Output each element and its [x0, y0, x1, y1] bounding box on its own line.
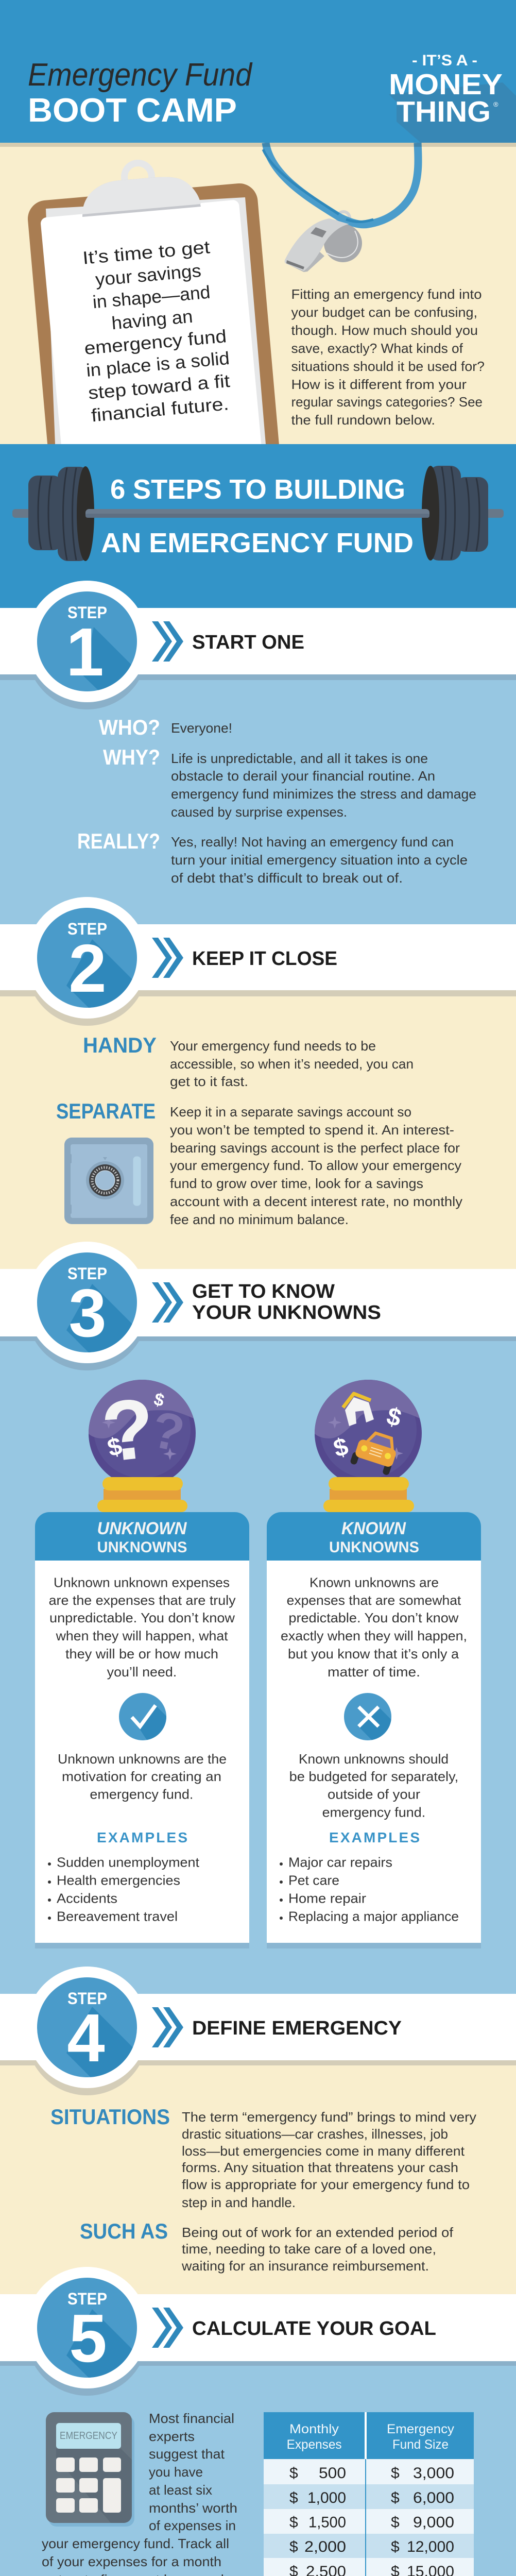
- examples: Health emergencies: [57, 1872, 180, 1888]
- examples: [280, 1829, 459, 1924]
- step 5 text: [42, 2411, 237, 2576]
- logo: It's a Money Thing: - IT’S A -: [412, 52, 477, 69]
- step 1 content: Life is unpredictable, and all it takes is one: [171, 751, 428, 766]
- step 5 banner: [0, 2267, 516, 2396]
- step 4 content: drastic situations—car crashes, illnesses, job: [182, 2126, 448, 2142]
- step 5 text: experts: [149, 2429, 195, 2444]
- step 4 banner: [0, 1967, 516, 2095]
- step 2 content: HANDY: [83, 1033, 157, 1057]
- step 4 content: forms. Any situation that threatens your cash: [182, 2160, 458, 2175]
- step 1 content: caused by surprise expenses.: [171, 804, 347, 820]
- step 2 banner: STEP: [67, 920, 107, 938]
- step 1 content: of debt that’s difficult to break out of.: [171, 870, 403, 886]
- table rows: $: [289, 2514, 298, 2531]
- verdict: Unknown unknowns are the: [58, 1751, 227, 1767]
- step 4 content: step in and handle.: [182, 2195, 296, 2210]
- logo: It's a Money Thing: [389, 52, 516, 143]
- icon: crystal ball, question marks: $: [105, 1432, 125, 1462]
- step 1 banner: STEP: [67, 603, 107, 622]
- table rows: $: [289, 2489, 298, 2506]
- step 4 content: The term “emergency fund” brings to mind very: [182, 2109, 476, 2125]
- step 5 text: of your expenses for a month: [42, 2554, 221, 2569]
- verdict: be budgeted for separately,: [289, 1769, 458, 1784]
- description: [281, 1574, 467, 1680]
- step 4 banner: STEP: [67, 1989, 107, 2008]
- step 3 banner: YOUR UNKNOWNS: [192, 1302, 381, 1324]
- step 1 banner: START ONE: [192, 632, 304, 653]
- step 4 content: flow is appropriate for your emergency fund to: [182, 2177, 470, 2192]
- table rows: $: [391, 2465, 400, 2482]
- table rows: $: [391, 2538, 400, 2555]
- step 5 text: your emergency fund. Track all: [42, 2536, 229, 2551]
- icon: crystal ball, question marks: ?: [97, 1380, 159, 1480]
- step 2 banner: [0, 897, 516, 1026]
- icon: crystal ball, house and car: $: [331, 1433, 351, 1463]
- step 1 content: REALLY?: [77, 829, 160, 853]
- examples: [48, 1829, 200, 1924]
- logo: It's a Money Thing: MONEY: [389, 68, 503, 101]
- description: Known unknowns are: [309, 1574, 439, 1590]
- step 4 content: SUCH AS: [80, 2219, 168, 2243]
- table rows: 3,000: [413, 2465, 454, 2482]
- examples: Sudden unemployment: [57, 1855, 200, 1870]
- panel heading: [97, 1519, 187, 1556]
- description: matter of time.: [328, 1664, 420, 1680]
- icon: clip: [82, 160, 201, 217]
- icon: cross mark: [344, 1693, 391, 1740]
- step 1 content: [77, 715, 476, 886]
- step 5 text: suggest that: [149, 2446, 225, 2462]
- examples: Pet care: [288, 1872, 339, 1888]
- panel: unknown unknowns: [35, 1512, 249, 1948]
- step 2 banner: 2: [68, 930, 107, 1006]
- intro text: though. How much should you: [291, 323, 478, 338]
- icon: chevrons: [152, 1282, 183, 1323]
- logo: It's a Money Thing: ®: [493, 100, 498, 108]
- header band: [0, 0, 516, 147]
- description: Unknown unknown expenses: [54, 1574, 230, 1590]
- icon: crystal ball, house and car: $: [384, 1402, 404, 1432]
- verdict: Known unknowns should: [299, 1751, 449, 1767]
- intro text: How is it different from your: [291, 377, 467, 392]
- table rows: 1,500: [308, 2514, 346, 2531]
- panel: known unknowns: [267, 1512, 481, 1948]
- icon: crystal ball, house and car: [315, 1376, 422, 1512]
- intro text: your budget can be confusing,: [291, 304, 477, 320]
- step 2 content: your emergency fund. To allow your emergency: [170, 1158, 461, 1173]
- step 1 content: turn your initial emergency situation into a cycle: [171, 852, 468, 868]
- icon: chevrons: [152, 2007, 183, 2047]
- step 1 banner: [0, 581, 516, 709]
- step 5 banner: 5: [69, 2300, 107, 2376]
- main heading: 6 STEPS TO BUILDING: [110, 474, 405, 505]
- clipboard text: step toward a fit: [88, 371, 231, 403]
- verdict: [289, 1751, 458, 1820]
- step 4 content: waiting for an insurance reimbursement.: [181, 2258, 429, 2274]
- examples: EXAMPLES: [97, 1829, 187, 1845]
- icon: crystal ball, question marks: $: [152, 1389, 166, 1411]
- description: but you know that it’s only a: [288, 1646, 459, 1662]
- step 2 content: [56, 1033, 462, 1227]
- step 3 banner: [0, 1242, 516, 1370]
- step 4 content: SITUATIONS: [50, 2105, 170, 2129]
- step 5 banner: CALCULATE YOUR GOAL: [192, 2318, 436, 2340]
- step 2 content: bearing savings account is the perfect place for: [170, 1140, 460, 1156]
- step 2 banner: KEEP IT CLOSE: [192, 948, 337, 970]
- examples: Accidents: [57, 1891, 117, 1906]
- table header: [287, 2422, 455, 2452]
- step 2 content: Keep it in a separate savings account so: [170, 1104, 411, 1120]
- examples: Bereavement travel: [57, 1908, 178, 1924]
- description: when they will happen, what: [56, 1628, 228, 1643]
- step 1 content: obstacle to derail your financial routine. An: [171, 768, 435, 784]
- step 5 text: of expenses in: [149, 2518, 236, 2533]
- description: [49, 1574, 236, 1680]
- intro text: Fitting an emergency fund into: [291, 286, 482, 302]
- step 2 content: you won’t be tempted to spend it. An interest-: [170, 1122, 454, 1138]
- description: you’ll need.: [107, 1664, 177, 1680]
- main heading: [101, 474, 414, 558]
- examples: Replacing a major appliance: [288, 1908, 459, 1924]
- icon: chevrons: [152, 2308, 183, 2348]
- table header: Monthly: [289, 2422, 339, 2436]
- step 1 content: Everyone!: [171, 720, 232, 736]
- table rows: 12,000: [407, 2538, 454, 2555]
- panel heading: KNOWN: [341, 1519, 406, 1538]
- description: expenses that are somewhat: [287, 1592, 461, 1608]
- step 1 banner: 1: [66, 614, 104, 690]
- step 1 content: Yes, really! Not having an emergency fund can: [171, 834, 454, 850]
- title: [28, 57, 253, 129]
- intro text: save, exactly? What kinds of: [291, 341, 463, 356]
- table rows: $: [289, 2465, 298, 2482]
- step 2 content: fee and no minimum balance.: [170, 1212, 349, 1227]
- intro text: situations should it be used for?: [291, 359, 485, 374]
- description: unpredictable. You don’t know: [49, 1610, 235, 1625]
- step 4 content: Being out of work for an extended period of: [182, 2225, 454, 2240]
- clipboard text: your savings: [95, 261, 202, 290]
- main heading: AN EMERGENCY FUND: [101, 528, 414, 558]
- table rows: $: [289, 2538, 298, 2555]
- step 5 text: at least six: [149, 2482, 212, 2498]
- step 4 content: [50, 2105, 476, 2274]
- table header: Fund Size: [392, 2437, 449, 2452]
- table rows: 2,000: [304, 2538, 346, 2555]
- table rows: 6,000: [413, 2489, 454, 2506]
- step 3 banner: 3: [68, 1275, 107, 1351]
- clipboard text: in shape—and: [92, 282, 211, 312]
- step 5 text: months’ worth: [149, 2500, 237, 2516]
- step 5 banner: STEP: [67, 2290, 107, 2308]
- clipboard text: emergency fund: [83, 326, 227, 359]
- icon: safe: [64, 1138, 153, 1224]
- intro text: [291, 286, 485, 428]
- illustration: whistle on lanyard: [263, 143, 418, 272]
- icon: chevrons: [152, 938, 183, 978]
- examples: EXAMPLES: [329, 1829, 420, 1845]
- step 3 banner: GET TO KNOW: [192, 1281, 335, 1302]
- step 4 content: time, needing to take care of a loved one,: [182, 2241, 436, 2257]
- step 2 content: SEPARATE: [56, 1099, 156, 1123]
- step 1 content: WHY?: [103, 745, 160, 769]
- clipboard text: It’s time to get: [82, 237, 211, 268]
- panel heading: UNKNOWNS: [97, 1539, 187, 1556]
- verdict: outside of your: [328, 1787, 420, 1802]
- step 2 content: account with a decent interest rate, no monthly: [170, 1194, 462, 1209]
- icon: calculator: EMERGENCY: [60, 2430, 117, 2442]
- icon: check mark: [119, 1693, 166, 1740]
- title: Emergency Fund: [28, 57, 253, 93]
- step 2 content: fund to grow over time, look for a savings: [170, 1176, 423, 1191]
- clipboard text: financial future.: [91, 394, 230, 426]
- clipboard text: having an: [111, 307, 194, 333]
- step 2 content: accessible, so when it’s needed, you can: [170, 1056, 414, 1072]
- table rows: $: [391, 2514, 400, 2531]
- icon: crystal ball, question marks: ?: [147, 1400, 190, 1463]
- verdict: emergency fund.: [90, 1787, 193, 1802]
- description: predictable. You don’t know: [288, 1610, 459, 1625]
- clipboard: [28, 160, 279, 444]
- description: exactly when they will happen,: [281, 1628, 467, 1643]
- step 5 text: you have: [149, 2464, 203, 2480]
- description: they will be or how much: [65, 1646, 218, 1662]
- step 1 content: WHO?: [99, 715, 160, 739]
- logo: It's a Money Thing: THING: [397, 95, 491, 128]
- verdict: motivation for creating an: [62, 1769, 221, 1784]
- table: monthly expenses and fund size: [264, 2412, 474, 2576]
- title: BOOT CAMP: [28, 91, 237, 129]
- intro text: regular savings categories? See: [291, 394, 483, 410]
- icon: chevrons: [152, 621, 183, 662]
- panel heading: UNKNOWN: [97, 1519, 187, 1538]
- examples: Major car repairs: [288, 1855, 392, 1870]
- table rows: 1,000: [307, 2489, 346, 2506]
- verdict: emergency fund.: [322, 1804, 425, 1820]
- step 2 content: Your emergency fund needs to be: [170, 1038, 376, 1054]
- icon: crystal ball, question marks: [89, 1376, 196, 1512]
- icon: calculator: [46, 2412, 134, 2527]
- description: are the expenses that are truly: [49, 1592, 236, 1608]
- step 3 banner: STEP: [67, 1264, 107, 1283]
- step 4 content: loss—but emergencies come in many different: [182, 2143, 465, 2159]
- table rows: $: [391, 2489, 400, 2506]
- table rows: 9,000: [413, 2514, 454, 2531]
- step 1 content: emergency fund minimizes the stress and damage: [171, 786, 476, 802]
- table rows: [289, 2465, 454, 2576]
- table header: Expenses: [287, 2437, 342, 2452]
- panel heading: UNKNOWNS: [329, 1539, 419, 1556]
- examples: Home repair: [288, 1891, 366, 1906]
- table header: Emergency: [387, 2422, 455, 2436]
- clipboard text: in place is a solid: [85, 348, 230, 381]
- step 2 content: get to it fast.: [170, 1074, 248, 1089]
- table rows: 500: [319, 2465, 346, 2482]
- step 4 banner: 4: [67, 2000, 105, 2076]
- step 4 banner: DEFINE EMERGENCY: [192, 2018, 402, 2039]
- verdict: [58, 1751, 227, 1802]
- panel heading: [329, 1519, 419, 1556]
- intro text: the full rundown below.: [291, 412, 435, 428]
- step 5 text: Most financial: [149, 2411, 234, 2426]
- icon: barbell: [12, 466, 504, 561]
- clipboard text: [84, 242, 230, 421]
